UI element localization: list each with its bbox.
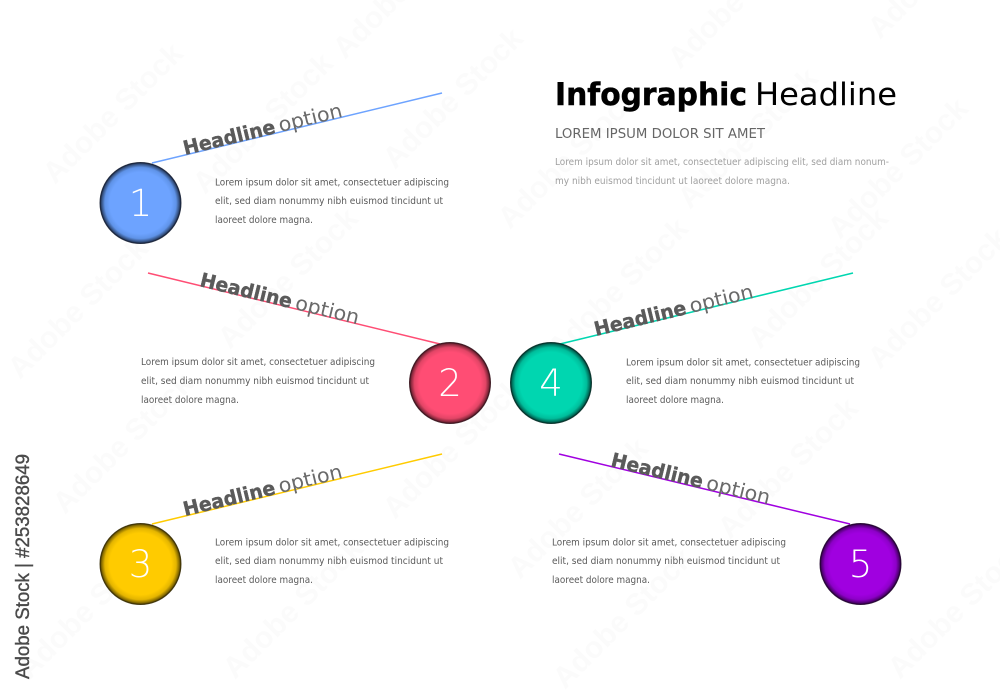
- body text 5: elit, sed diam nonummy nibh euismod tincidunt ut: [552, 556, 780, 567]
- watermark pattern: Adobe Stock: [547, 542, 700, 695]
- headline 3: option: [276, 459, 345, 498]
- icon: number circle 1: 1: [129, 182, 152, 225]
- stock id label: Adobe Stock | #253828649: [13, 454, 34, 679]
- body text 3: [215, 538, 449, 586]
- title: Headline: [755, 77, 897, 113]
- icon: number circle 3: [100, 524, 181, 604]
- body text 5: [552, 538, 786, 586]
- panel: item 5: [552, 448, 901, 604]
- body text 3: Lorem ipsum dolor sit amet, consectetuer adipiscing: [215, 538, 449, 548]
- watermark pattern: Adobe Stock: [217, 532, 370, 685]
- body text 4: elit, sed diam nonummy nibh euismod tincidunt ut: [626, 376, 854, 387]
- line 1: [152, 93, 442, 163]
- watermark pattern: Adobe Stock: [822, 92, 975, 245]
- icon: number circle 3: 3: [129, 543, 152, 586]
- icon: number circle 5: 5: [849, 543, 872, 586]
- body text 4: Lorem ipsum dolor sit amet, consectetuer adipiscing: [626, 358, 860, 368]
- icon: number circle 2: [410, 342, 490, 424]
- panel: item 4: [510, 273, 860, 424]
- line 2: [148, 273, 440, 344]
- panel: item 3: [100, 454, 449, 604]
- watermark pattern: Adobe Stock: [37, 37, 190, 190]
- watermark pattern: Adobe Stock: [742, 202, 895, 355]
- headline 2: option: [293, 291, 362, 329]
- body text 1: [215, 178, 449, 226]
- watermark pattern: Adobe Stock: [47, 367, 200, 520]
- body text 2: laoreet dolore magna.: [141, 395, 239, 406]
- icon: number circle 1: [100, 162, 181, 244]
- watermark pattern: Adobe Stock: [377, 372, 530, 525]
- title: [555, 77, 897, 113]
- headline 2: Headline: [198, 269, 295, 313]
- intro text: [555, 157, 889, 187]
- body text 1: elit, sed diam nonummy nibh euismod tincidunt ut: [215, 196, 443, 207]
- headline 5: [609, 448, 773, 509]
- body text 5: laoreet dolore magna.: [552, 575, 650, 586]
- intro text: Lorem ipsum dolor sit amet, consectetuer adipiscing elit, sed diam nonum-: [555, 157, 889, 168]
- headline 1: Headline: [181, 115, 278, 160]
- watermark pattern: Adobe Stock: [187, 47, 340, 200]
- body text 5: Lorem ipsum dolor sit amet, consectetuer adipiscing: [552, 538, 786, 548]
- headline 1: option: [276, 98, 345, 137]
- headline 3: [181, 459, 345, 521]
- intro text: my nibh euismod tincidunt ut laoreet dolore magna.: [555, 176, 790, 187]
- body text 3: elit, sed diam nonummy nibh euismod tincidunt ut: [215, 556, 443, 567]
- body text 4: [626, 358, 860, 406]
- watermark pattern: Adobe Stock: [672, 62, 825, 215]
- watermark pattern: Adobe Stock: [2, 232, 155, 385]
- watermark pattern: Adobe Stock: [542, 212, 695, 365]
- subtitle: LOREM IPSUM DOLOR SIT AMET: [555, 126, 766, 142]
- headline 5: Headline: [609, 449, 706, 493]
- headline 4: option: [687, 279, 756, 318]
- title block: [555, 77, 897, 187]
- watermark pattern: Adobe Stock: [377, 22, 530, 175]
- headline 2: [198, 268, 362, 329]
- watermark pattern: Adobe Stock: [492, 82, 645, 235]
- panel: item 1: [100, 93, 449, 244]
- title: Infographic: [555, 77, 747, 113]
- icon: number circle 2: 2: [438, 362, 462, 405]
- headline 4: Headline: [592, 296, 689, 341]
- body text 3: laoreet dolore magna.: [215, 575, 313, 586]
- headline 1: [181, 98, 345, 160]
- body text 2: [141, 357, 375, 406]
- body text 4: laoreet dolore magna.: [626, 395, 724, 406]
- headline 5: option: [704, 471, 773, 509]
- line 3: [152, 454, 442, 524]
- body text 2: Lorem ipsum dolor sit amet, consectetuer adipiscing: [141, 357, 375, 368]
- panel: item 2: [141, 268, 490, 424]
- watermark pattern: Adobe Stock: [712, 392, 865, 545]
- body text 1: Lorem ipsum dolor sit amet, consectetuer adipiscing: [215, 178, 449, 188]
- body text 1: laoreet dolore magna.: [215, 215, 313, 226]
- watermark pattern: Adobe Stock: [502, 432, 655, 585]
- line 5: [559, 454, 850, 524]
- body text 2: elit, sed diam nonummy nibh euismod tincidunt ut: [141, 376, 369, 387]
- icon: number circle 4: 4: [539, 362, 563, 405]
- watermark pattern: Adobe Stock: [12, 532, 165, 685]
- headline 3: Headline: [181, 476, 278, 521]
- headline 4: [592, 279, 756, 341]
- icon: number circle 4: [510, 342, 592, 424]
- line 4: [560, 273, 853, 344]
- watermark pattern: Adobe Stock: [212, 202, 365, 355]
- icon: number circle 5: [820, 524, 901, 604]
